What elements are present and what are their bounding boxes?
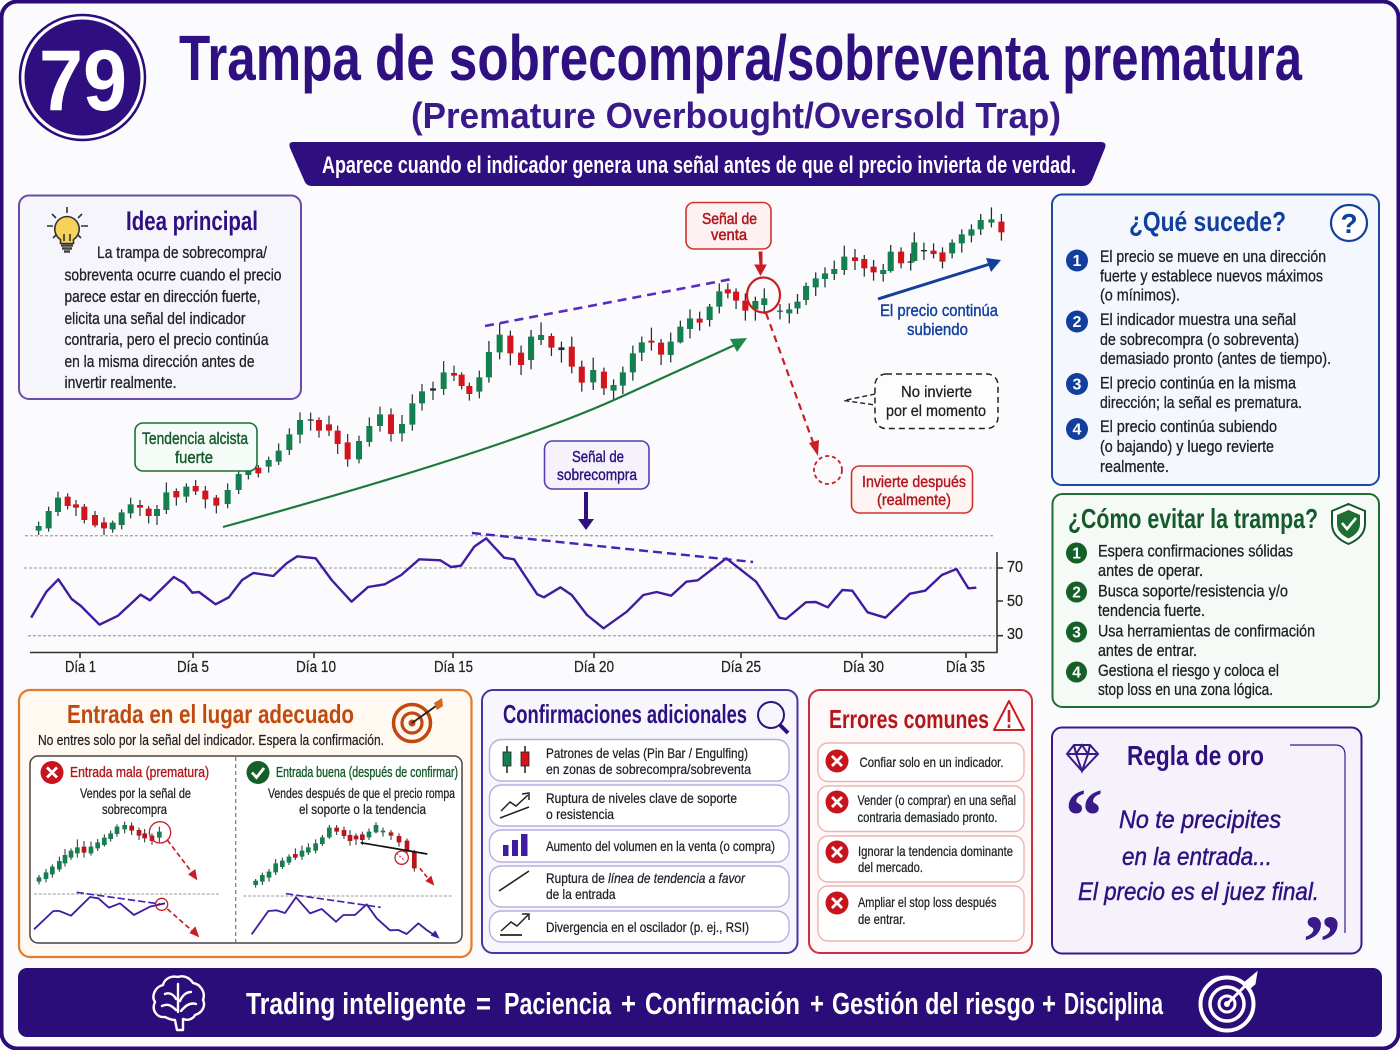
- day labels: Día 20: [574, 659, 614, 676]
- ribbon: Aparece cuando el indicador genera una señal antes de que el precio invierta de verdad.: [322, 152, 1076, 179]
- body text: parece estar en dirección fuerte,: [64, 288, 260, 306]
- confirmation text: Divergencia en el oscilador (p. ej., RSI): [546, 919, 749, 935]
- callout: no invierte por el momento: por el momento: [886, 403, 986, 420]
- callout: invierte después: (realmente): [877, 492, 951, 509]
- icon: question mark: ?: [1340, 208, 1358, 239]
- list text: stop loss en una zona lógica.: [1098, 681, 1273, 699]
- day labels: Día 5: [177, 659, 209, 676]
- number markers: 1: [1072, 546, 1081, 562]
- error rows: [818, 743, 1024, 941]
- panel: regla de oro: [1052, 728, 1362, 985]
- number badge: [20, 15, 145, 140]
- error text: del mercado.: [858, 859, 923, 875]
- bad entry text: [80, 785, 191, 817]
- panel: idea principal: [19, 196, 301, 399]
- day labels: Día 35: [946, 659, 985, 676]
- banner text: +: [1042, 986, 1056, 1021]
- callout: invierte después: Invierte después: [862, 474, 966, 491]
- oscillator chart: [24, 533, 1023, 676]
- arrow: to oscillator: [578, 492, 594, 530]
- body text: [64, 244, 282, 392]
- panel: qué sucede: [1052, 194, 1379, 485]
- good entry heading: Entrada buena (después de confirmar): [276, 765, 458, 781]
- list text: (o bajando) y luego revierte: [1100, 438, 1274, 456]
- error text: [858, 754, 1016, 927]
- number markers: 4: [1072, 664, 1081, 682]
- confirmation text: Aumento del volumen en la venta (o compra): [546, 838, 775, 854]
- price chart: [39, 202, 1001, 535]
- icon: question mark: [1331, 205, 1367, 241]
- icon: trend line: [499, 871, 529, 891]
- body text: invertir realmente.: [64, 374, 176, 392]
- arrow: uptrend: [223, 338, 747, 527]
- callout: señal de venta: Señal de: [702, 211, 757, 228]
- oscillator level labels: 70: [1007, 559, 1023, 576]
- callout: no invierte por el momento: No invierte: [901, 384, 972, 401]
- callout: señal de venta: venta: [711, 227, 747, 244]
- panel: entrada en el lugar adecuado: [19, 690, 472, 957]
- confirmation rows: [490, 740, 789, 942]
- good entry text: el soporte o la tendencia: [299, 801, 426, 817]
- confirmation text: Ruptura de niveles clave de soporte: [546, 790, 737, 806]
- comparison box: [30, 756, 462, 943]
- quote text: No te precipites: [1119, 806, 1281, 834]
- callout: tendencia alcista fuerte: [135, 423, 257, 471]
- icon: magnifier: [758, 702, 788, 733]
- number markers: 2: [1073, 314, 1082, 331]
- confirmation text: en zonas de sobrecompra/sobreventa: [546, 761, 751, 777]
- title: Trampa de sobrecompra/: [179, 22, 787, 94]
- label: el precio continúa subiendo: El precio continúa: [880, 301, 998, 320]
- list text: El precio continúa subiendo: [1100, 418, 1277, 436]
- bad entry charts: [34, 822, 221, 937]
- list text: El precio se mueve en una dirección: [1100, 248, 1326, 266]
- confirmation text: o resistencia: [546, 806, 614, 822]
- heading: ¿Cómo evitar la trampa?: [1068, 503, 1318, 534]
- list text: [1098, 542, 1315, 699]
- title: [179, 22, 1302, 94]
- axes: [30, 552, 1003, 658]
- banner text: =: [476, 986, 491, 1021]
- heading: Idea principal: [126, 206, 258, 236]
- arrow: later reversal: [766, 313, 819, 456]
- heading: Regla de oro: [1127, 740, 1264, 771]
- banner text: Gestión del riesgo: [832, 986, 1035, 1021]
- bad entry heading: [40, 761, 209, 784]
- icon: candles: [503, 746, 529, 773]
- icon: warning: [994, 701, 1024, 730]
- oscillator level labels: 50: [1007, 593, 1023, 610]
- icon: breakout chart: [500, 793, 529, 818]
- good entry charts: [243, 822, 452, 939]
- banner text: Confirmación: [645, 986, 800, 1021]
- list text: Usa herramientas de confirmación: [1098, 622, 1315, 640]
- number markers: [1066, 250, 1088, 440]
- day labels: Día 25: [721, 659, 761, 676]
- confirmation text: Ruptura de línea de tendencia a favor: [546, 870, 746, 886]
- ribbon: [289, 142, 1105, 186]
- subtitle: (Premature Overbought/Oversold Trap): [411, 95, 1061, 136]
- day labels: [65, 659, 985, 676]
- panel: confirmaciones adicionales: [482, 690, 798, 953]
- banner text: [246, 986, 1164, 1021]
- banner text: +: [621, 986, 636, 1021]
- number markers: 2: [1072, 584, 1081, 602]
- number markers: [1066, 542, 1087, 682]
- number markers: 1: [1073, 253, 1082, 270]
- list text: realmente.: [1100, 458, 1169, 476]
- error text: contraria demasiado pronto.: [858, 809, 998, 825]
- number markers: 3: [1072, 624, 1081, 642]
- list text: fuerte y establece nuevos máximos: [1100, 268, 1323, 286]
- day labels: Día 10: [296, 659, 336, 676]
- banner text: Trading inteligente: [246, 986, 466, 1021]
- list text: antes de operar.: [1098, 562, 1203, 580]
- list text: El precio continúa en la misma: [1100, 374, 1297, 392]
- banner text: Disciplina: [1064, 986, 1164, 1021]
- list text: [1100, 248, 1331, 476]
- quote mark close: ”: [1303, 901, 1341, 985]
- day labels: Día 30: [843, 659, 884, 676]
- list text: Gestiona el riesgo y coloca el: [1098, 662, 1279, 680]
- signal circle: [747, 278, 780, 312]
- icon: brain: [153, 976, 204, 1030]
- number badge: 79: [39, 33, 127, 129]
- heading: Confirmaciones adicionales: [503, 699, 747, 729]
- callout: tendencia alcista fuerte: fuerte: [175, 449, 213, 467]
- error text: Vender (o comprar) en una señal: [858, 792, 1016, 808]
- confirmation text: de la entrada: [546, 886, 616, 902]
- label: el precio continúa subiendo: subiendo: [907, 320, 968, 339]
- callout: señal de sobrecompra: Señal de: [572, 449, 624, 466]
- quote mark open: “: [1065, 774, 1103, 858]
- icon: diamond: [1067, 745, 1098, 771]
- candlesticks: second segment: [489, 207, 1001, 401]
- banner text: Paciencia: [504, 986, 612, 1021]
- list text: de sobrecompra (o sobreventa): [1100, 331, 1299, 349]
- RSI line: [31, 538, 976, 628]
- reversal point: [814, 456, 842, 484]
- list text: demasiado pronto (antes de tiempo).: [1100, 350, 1331, 368]
- label: el precio continúa subiendo: [880, 301, 998, 339]
- body text: elicita una señal del indicador: [64, 310, 246, 328]
- footer banner: [18, 968, 1382, 1037]
- error icons: [826, 750, 848, 914]
- body text: en la misma dirección antes de: [64, 353, 254, 371]
- bad entry text: sobrecompra: [102, 801, 167, 817]
- bad entry text: Vendes por la señal de: [80, 785, 191, 801]
- day labels: Día 15: [434, 659, 473, 676]
- heading: ¿Qué sucede?: [1129, 206, 1286, 237]
- icon: divergence chart: [500, 914, 529, 935]
- callout: tendencia alcista fuerte: Tendencia alcista: [142, 430, 249, 448]
- oscillator level labels: 30: [1007, 626, 1023, 643]
- error text: de entrar.: [858, 911, 906, 927]
- number markers: 4: [1073, 422, 1082, 438]
- icon: target: [1200, 972, 1257, 1030]
- quote text: [1078, 806, 1319, 906]
- error text: Ignorar la tendencia dominante: [858, 843, 1013, 859]
- body text: sobreventa ocurre cuando el precio: [64, 266, 282, 284]
- callout: señal de sobrecompra: sobrecompra: [557, 467, 637, 484]
- good entry heading: [246, 761, 458, 784]
- divergence line on oscillator: [472, 533, 753, 562]
- banner text: +: [810, 986, 824, 1021]
- arrow: price keeps rising: [878, 258, 1001, 299]
- list text: (o mínimos).: [1100, 286, 1180, 304]
- icon: light bulb: [47, 207, 88, 252]
- confirmation text: [546, 745, 775, 935]
- number markers: 3: [1073, 376, 1082, 394]
- quote text: en la entrada...: [1122, 843, 1272, 871]
- list text: El indicador muestra una señal: [1100, 311, 1296, 329]
- good entry text: Vendes después de que el precio rompa: [268, 785, 455, 801]
- error text: Ampliar el stop loss después: [858, 894, 996, 910]
- callout: señal de venta: [686, 202, 771, 249]
- icon: shield: [1332, 504, 1365, 544]
- arrow: to signal candle: [755, 252, 766, 275]
- good entry text: [268, 785, 455, 817]
- quote text: El precio es el juez final.: [1078, 878, 1319, 906]
- icon: target: [394, 698, 443, 742]
- day labels: Día 1: [65, 659, 96, 676]
- list text: tendencia fuerte.: [1098, 602, 1205, 620]
- subheading: No entres solo por la señal del indicador. Espera la confirmación.: [38, 732, 384, 749]
- list text: antes de entrar.: [1098, 642, 1197, 660]
- heading: Errores comunes: [829, 704, 989, 734]
- divergence line on price: [485, 279, 732, 326]
- callout: invierte después: [852, 466, 972, 513]
- body text: contraria, pero el precio continúa: [64, 331, 269, 349]
- heading: Entrada en el lugar adecuado: [67, 699, 354, 729]
- oscillator level labels: [1007, 559, 1023, 643]
- body text: La trampa de sobrecompra/: [97, 244, 267, 262]
- callout: no invierte por el momento: [844, 374, 998, 428]
- list text: Busca soporte/resistencia y/o: [1098, 582, 1288, 600]
- callout: señal de sobrecompra: [544, 441, 649, 489]
- header: [20, 15, 1302, 186]
- list text: dirección; la señal es prematura.: [1100, 394, 1302, 412]
- candlesticks: first segment: [39, 361, 479, 535]
- panel: cómo evitar la trampa: [1052, 494, 1379, 707]
- panel: errores comunes: [809, 690, 1032, 953]
- list text: Espera confirmaciones sólidas: [1098, 542, 1293, 560]
- icon: volume bars: [503, 834, 528, 856]
- bad entry heading: Entrada mala (prematura): [70, 765, 209, 781]
- confirmation text: Patrones de velas (Pin Bar / Engulfing): [546, 745, 748, 761]
- error text: Confiar solo en un indicador.: [860, 754, 1004, 770]
